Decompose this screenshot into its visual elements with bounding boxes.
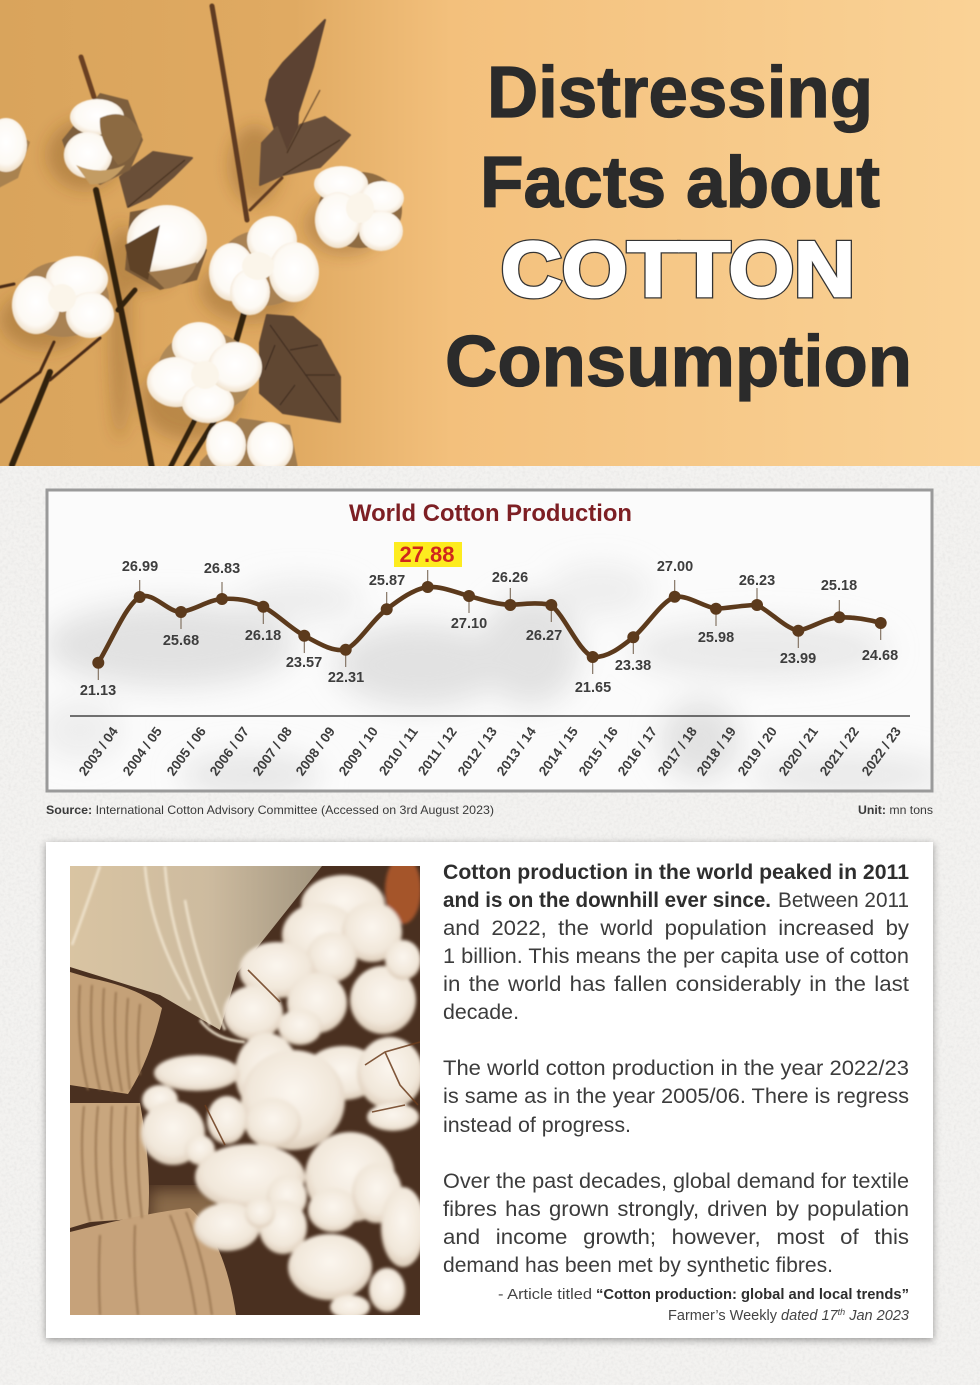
title: Facts about [480, 143, 880, 223]
value labels: 21.13 [80, 683, 116, 699]
data point markers [92, 581, 887, 669]
unit note: Unit: mn tons [858, 803, 933, 817]
paragraph 1: and is on the downhill ever since. [443, 889, 771, 912]
soft shadows [0, 120, 385, 440]
paragraph 1: 1 billion. This means the per capita use of cotton [443, 945, 909, 968]
year labels: 2005 / 06 [164, 724, 209, 778]
outlined word: COTTON [501, 225, 855, 313]
title: Consumption [445, 322, 912, 402]
value labels: 26.99 [122, 559, 158, 575]
yarn spools [70, 972, 236, 1315]
source note: Source: International Cotton Advisory Committee (Accessed on 3rd August 2023) [46, 803, 494, 817]
paragraph 3: Over the past decades, global demand for textile [443, 1170, 909, 1193]
attribution: - Article titled [498, 1287, 592, 1303]
year labels: 2007 / 08 [250, 724, 295, 778]
paragraph 2: The world cotton production in the year 2022/23 [443, 1057, 909, 1080]
body text [443, 861, 910, 1277]
year labels: 2010 / 11 [376, 724, 421, 778]
value labels: 25.87 [369, 573, 405, 589]
hero banner background [0, 0, 980, 466]
year labels: 2014 / 15 [536, 724, 581, 778]
value labels: 22.31 [328, 670, 364, 686]
attribution: Farmer’s Weekly dated 17 [668, 1308, 838, 1324]
year labels: 2008 / 09 [293, 724, 338, 778]
value labels: 26.23 [739, 573, 775, 589]
year labels: 2004 / 05 [120, 724, 165, 778]
year labels: 2003 / 04 [76, 724, 121, 778]
paragraph 1: decade. [443, 1001, 519, 1024]
value labels: 21.65 [575, 680, 611, 696]
attribution [498, 1287, 909, 1324]
year labels: 2011 / 12 [415, 724, 460, 778]
title [445, 53, 912, 402]
attribution: th [838, 1307, 845, 1317]
year labels: 2020 / 21 [776, 724, 821, 778]
boll: far left [12, 256, 114, 338]
stems [0, 6, 282, 468]
attribution: “Cotton production: global and local trends” [596, 1287, 909, 1303]
year labels: 2013 / 14 [494, 724, 539, 778]
paragraph 1 [443, 861, 910, 1024]
title: Distressing [487, 53, 873, 133]
cloud backdrop [40, 565, 950, 797]
paragraph 2: is same as in the year 2005/06. There is regress [443, 1085, 909, 1108]
paper background [0, 466, 980, 1385]
boll: bottom cluster [147, 322, 262, 423]
paragraph 3: and income growth; however, most of this [443, 1226, 909, 1249]
value labels: 26.27 [526, 628, 562, 644]
year labels: 2018 / 19 [694, 724, 739, 778]
value labels: 23.99 [780, 651, 816, 667]
year labels: 2009 / 10 [336, 724, 381, 778]
value labels: 27.10 [451, 616, 487, 632]
value labels: 23.57 [286, 655, 322, 671]
paragraph 1: and 2022, the world population increased by [443, 917, 910, 940]
boll: centre left [125, 205, 207, 290]
value labels: 25.18 [821, 578, 857, 594]
outlined word: COTTON [501, 225, 855, 313]
attribution: Jan 2023 [845, 1308, 909, 1324]
year labels: 2015 / 16 [576, 724, 621, 778]
boll: bottom [200, 418, 298, 472]
year labels [76, 724, 904, 778]
boll: left edge [0, 115, 30, 190]
axis line [70, 715, 910, 717]
leaves [120, 20, 350, 422]
photo: cotton and yarn [70, 856, 425, 1319]
boll: top left [62, 93, 143, 185]
paragraph 2 [443, 1057, 909, 1137]
boll: right [314, 166, 404, 251]
paragraph 1: in the world has fallen considerably in the last [443, 973, 909, 996]
value labels: 25.68 [163, 633, 199, 649]
boll: centre [209, 216, 319, 315]
value labels: 24.68 [862, 648, 898, 664]
year labels: 2019 / 20 [735, 724, 780, 778]
paragraph 3: fibres has grown strongly, driven by population [443, 1198, 909, 1221]
paragraph 1: Cotton production in the world peaked in 2011 [443, 861, 909, 884]
panel: text and photo card [46, 842, 933, 1338]
year labels: 2006 / 07 [207, 724, 252, 778]
paragraph 3 [443, 1170, 909, 1277]
value labels: 26.18 [245, 628, 281, 644]
year labels: 2017 / 18 [655, 724, 700, 778]
value labels: 25.98 [698, 630, 734, 646]
value labels: 27.00 [657, 559, 693, 575]
paragraph 1: Between 2011 [778, 889, 909, 912]
value labels: 26.26 [492, 570, 528, 586]
year labels: 2022 / 23 [859, 724, 904, 778]
photo: cotton branches [0, 6, 404, 472]
value labels: 23.38 [615, 658, 651, 674]
chart heading: World Cotton Production [349, 500, 632, 527]
leader ticks [98, 570, 881, 680]
panel: world cotton production chart [40, 490, 950, 797]
peak value highlight: 27.88 [399, 542, 455, 567]
paragraph 3: demand has been met by synthetic fibres. [443, 1254, 833, 1277]
year labels: 2012 / 13 [455, 724, 500, 778]
cotton bolls [141, 856, 425, 1319]
paragraph 2: instead of progress. [443, 1114, 631, 1137]
production line [98, 587, 881, 663]
year labels: 2016 / 17 [615, 724, 660, 778]
value labels: 26.83 [204, 561, 240, 577]
value labels [80, 559, 898, 699]
year labels: 2021 / 22 [817, 724, 862, 778]
